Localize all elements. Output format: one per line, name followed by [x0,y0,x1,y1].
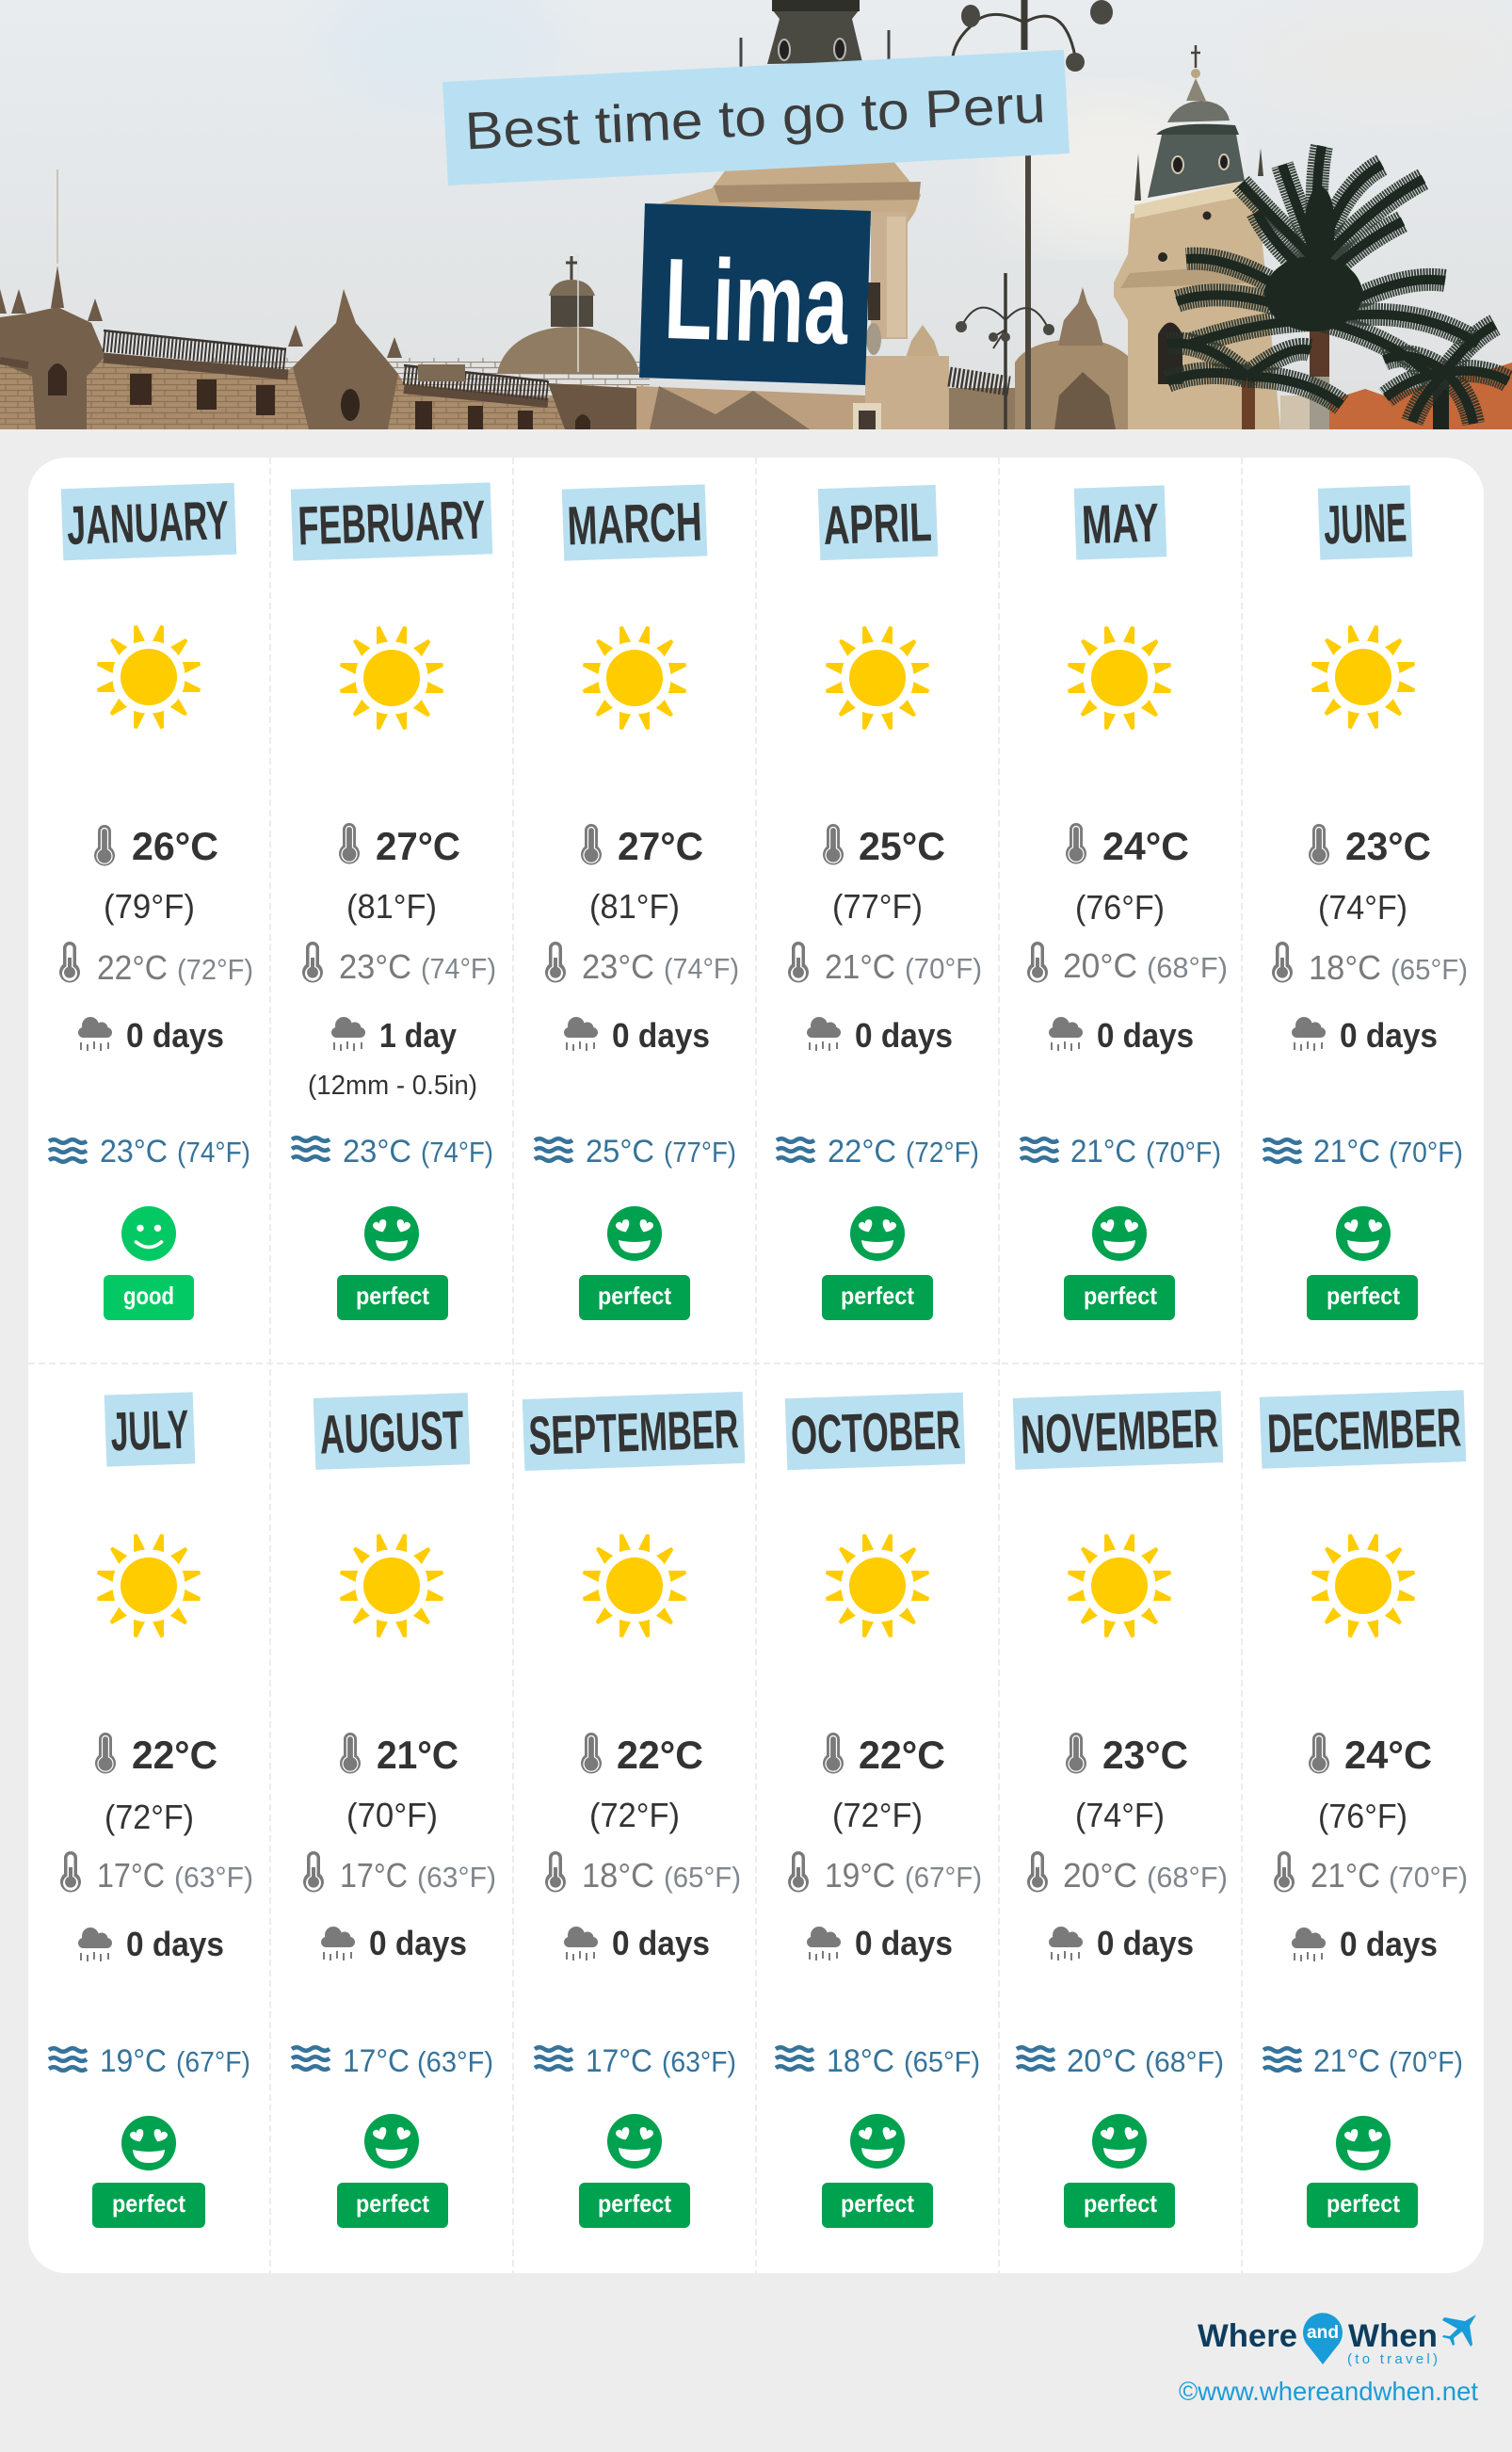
month label: NOVEMBER [1020,1397,1219,1466]
high temperature [94,824,218,868]
icon: sun [583,626,686,730]
low temperature: (74°F) [664,952,739,985]
rainy days [807,1016,953,1055]
high temperature Fahrenheit: (72°F) [589,1796,680,1834]
sea temperature: (63°F) [417,2045,493,2078]
high temperature: 24°C [1344,1733,1432,1777]
low temperature [788,1851,982,1895]
sea temperature [1263,2043,1463,2079]
month label [291,482,492,561]
sea temperature [49,1134,250,1170]
rating: perfect [579,1275,690,1320]
rating: perfect [1064,1275,1175,1320]
rainy days: 1 day [379,1016,457,1055]
month label: MAY [1081,492,1160,556]
sea temperature [49,2043,250,2079]
panel: January [49,483,253,1320]
icon: perfect smiley [1092,1206,1147,1261]
low temperature: (74°F) [421,952,496,985]
sea temperature: 23°C [343,1134,411,1170]
high temperature [581,824,703,868]
high temperature Fahrenheit: (76°F) [1318,1797,1407,1835]
panel: May [1021,485,1228,1320]
sea temperature [292,1134,493,1170]
month label [785,1393,965,1470]
high temperature [823,824,945,868]
rainy days: 0 days [855,1924,953,1962]
low temperature: 20°C [1063,1856,1137,1895]
rating: perfect [337,2183,448,2228]
rainy days [78,1016,224,1055]
city label: Lima [639,203,871,385]
low temperature: (70°F) [905,952,982,985]
high temperature: 21°C [377,1733,458,1777]
icon: perfect smiley [850,1206,905,1261]
sea temperature: 20°C [1067,2043,1136,2079]
rating: perfect: perfect [112,2189,185,2218]
rainy days [331,1016,457,1055]
month label: JUNE [1323,492,1407,557]
month label [523,1392,745,1471]
high temperature: 27°C [618,824,703,868]
sea temperature: (67°F) [176,2045,250,2078]
rainy days [321,1924,467,1962]
sea temperature: (72°F) [906,1136,979,1169]
panel: July [49,1392,253,2228]
rating: perfect [822,1275,933,1320]
high temperature: 22°C [132,1733,217,1777]
rating: perfect: perfect [1084,2189,1157,2218]
month label [818,485,938,560]
low temperature: (67°F) [905,1861,982,1894]
rating: perfect: perfect [841,2189,914,2218]
panel: August [292,1393,496,2228]
rainy days: 0 days [612,1924,710,1962]
rating: perfect: perfect [356,2189,429,2218]
icon: good smiley [121,1206,176,1261]
high temperature: 24°C [1102,824,1189,868]
month label [105,1392,195,1467]
high temperature: 22°C [617,1733,703,1777]
low temperature [545,942,739,986]
rating: perfect [1307,1275,1418,1320]
high temperature [1309,824,1431,868]
icon: sun [826,1534,929,1637]
sea temperature: (70°F) [1146,1136,1221,1169]
sea temperature [777,1134,979,1170]
high temperature [1066,823,1189,868]
month label: JULY [109,1399,190,1462]
rating: perfect [579,2183,690,2228]
panel: March [535,484,739,1320]
icon: sun [340,626,443,730]
icon: sun [1311,1534,1415,1637]
high temperature: 23°C [1345,824,1431,868]
high temperature: 22°C [859,1733,945,1777]
low temperature: 18°C [1309,948,1381,987]
rating: perfect [1064,2183,1175,2228]
rating: perfect: perfect [598,1282,671,1310]
high temperature Fahrenheit: (79°F) [104,887,195,926]
sea temperature: 19°C [100,2043,167,2079]
sea temperature: 22°C [828,1134,896,1170]
month label: JANUARY [66,490,230,557]
rainy days: 0 days [369,1924,467,1962]
icon: map pin [1303,2313,1343,2364]
sea temperature: (70°F) [1389,1136,1463,1169]
icon: perfect smiley [1092,2114,1147,2169]
month label: AUGUST [318,1399,465,1466]
icon: perfect smiley [607,1206,662,1261]
rainy days: 0 days [612,1016,710,1055]
sea temperature [776,2043,980,2079]
low temperature: 21°C [825,947,895,986]
low temperature: 21°C [1311,1856,1380,1895]
low temperature: (72°F) [177,953,253,986]
sea temperature: (63°F) [662,2045,736,2078]
white calendar panel [28,458,1484,2273]
panel: June [1263,485,1468,1320]
sea temperature: (70°F) [1389,2045,1463,2078]
sea temperature: 23°C [100,1134,168,1170]
panel: October [776,1393,982,2228]
high temperature [95,1733,217,1777]
rating: good [104,1275,194,1320]
high temperature Fahrenheit: (70°F) [346,1796,438,1834]
month label [1013,1391,1223,1470]
icon: perfect smiley [1336,1206,1391,1261]
high temperature [581,1733,703,1777]
low temperature [302,942,496,986]
low temperature: 19°C [825,1856,895,1895]
rating: perfect [1307,2183,1418,2228]
icon: sun [97,625,201,729]
panel: February [291,482,496,1320]
rainy days [78,1925,224,1963]
rating: perfect [337,1275,448,1320]
title band: Best time to go to Peru [442,50,1070,186]
sea temperature: 21°C [1313,1134,1380,1170]
sea temperature: (74°F) [177,1136,250,1169]
rainy days [807,1924,953,1962]
high temperature [340,1733,458,1777]
panel: November [1013,1391,1228,2228]
high temperature Fahrenheit: (81°F) [346,887,437,926]
low temperature: (65°F) [1391,953,1468,986]
sea temperature: (74°F) [421,1136,493,1169]
rainy days: 0 days [1097,1924,1194,1962]
rainy days: 0 days [1340,1925,1438,1963]
low temperature [545,1851,741,1895]
sea temperature [292,2043,493,2079]
title band: Best time to go to Peru: Best time to go to Peru [463,74,1047,161]
sea temperature: (77°F) [664,1136,736,1169]
rainy days [564,1016,710,1055]
low temperature: (70°F) [1389,1861,1468,1894]
low temperature [60,1851,253,1895]
icon: perfect smiley [364,1206,419,1261]
sea temperature: 18°C [827,2043,894,2079]
rating: perfect [92,2183,205,2228]
icon: plane [1442,2315,1476,2347]
rating: perfect [822,2183,933,2228]
sea temperature: 25°C [586,1134,654,1170]
logo: Where and When (to travel): (to travel) [1347,2351,1438,2367]
icon: sun [1311,625,1415,729]
icon: sun [1068,626,1171,730]
sea temperature: 17°C [586,2043,652,2079]
low temperature: (68°F) [1147,951,1228,984]
rating: good: good [123,1282,174,1310]
month label: FEBRUARY [297,490,487,557]
low temperature [59,942,253,987]
high temperature Fahrenheit: (81°F) [589,887,680,926]
rating: perfect: perfect [1327,2189,1400,2218]
high temperature [1066,1733,1188,1777]
panel: September [523,1392,745,2228]
month label: SEPTEMBER [527,1398,740,1467]
high temperature: 23°C [1102,1733,1188,1777]
rainy days [1049,1016,1194,1055]
high temperature Fahrenheit: (74°F) [1075,1796,1165,1834]
icon: sun [826,626,929,730]
month label [1318,485,1412,560]
icon: sun [97,1534,201,1637]
logo: Where and When (to travel): and [1307,2323,1339,2343]
high temperature: 25°C [859,824,945,868]
high temperature Fahrenheit: (74°F) [1318,888,1407,927]
low temperature: 20°C [1063,946,1137,985]
sea temperature [1021,1134,1221,1170]
icon: perfect smiley [1336,2116,1391,2170]
rainy days [1292,1016,1438,1055]
rainy days: 0 days [126,1925,224,1963]
rainy days: 0 days [1340,1016,1438,1055]
low temperature: (63°F) [417,1861,496,1894]
low temperature [1274,1851,1468,1895]
icon: perfect smiley [121,2116,176,2170]
rainy days [1292,1925,1438,1963]
high temperature Fahrenheit: (77°F) [832,887,923,926]
city label: Lima: Lima [663,234,851,368]
month label [1074,485,1166,560]
high temperature Fahrenheit: (72°F) [832,1796,923,1834]
rainfall amount: (12mm - 0.5in) [308,1071,477,1101]
sea temperature [535,2043,736,2079]
rainy days [1049,1924,1194,1962]
icon: sun [340,1534,443,1637]
rainy days: 0 days [1097,1016,1194,1055]
icon: sun [1068,1534,1171,1637]
low temperature [1027,1851,1228,1895]
icon: perfect smiley [607,2114,662,2169]
month label: OCTOBER [790,1399,961,1466]
logo: Where and When (to travel) [1198,2313,1476,2367]
icon: sun [583,1534,686,1637]
panel: April [777,485,982,1320]
high temperature [823,1733,945,1777]
low temperature: 17°C [340,1856,408,1895]
rating: perfect: perfect [1327,1282,1400,1310]
high temperature Fahrenheit: (76°F) [1075,888,1165,927]
month label [314,1393,470,1470]
high temperature: 27°C [376,824,460,868]
rating: perfect: perfect [356,1282,429,1310]
high temperature: 26°C [132,824,218,868]
low temperature: (68°F) [1147,1861,1228,1894]
sea temperature [1263,1134,1463,1170]
low temperature: 23°C [582,947,654,986]
low temperature [1272,942,1468,987]
sea temperature: 17°C [343,2043,410,2079]
logo: Where and When (to travel): Where [1198,2318,1297,2354]
month label: MARCH [566,492,703,557]
rainy days: 0 days [126,1016,224,1055]
icon: perfect smiley [850,2114,905,2169]
high temperature Fahrenheit: (72°F) [105,1798,194,1836]
month label [562,484,707,561]
low temperature: 23°C [339,947,411,986]
rating: perfect: perfect [1084,1282,1157,1310]
sea temperature [535,1134,736,1170]
panel: December [1260,1390,1468,2228]
low temperature [788,942,982,986]
rainy days: 0 days [855,1016,953,1055]
website credit: ©www.whereandwhen.net [1179,2377,1478,2406]
low temperature: (65°F) [664,1861,741,1894]
rating: perfect: perfect [598,2189,671,2218]
header photo: Lima plaza with cathedral and palms [0,0,1512,429]
low temperature: 22°C [97,948,168,987]
month label [61,483,236,560]
sea temperature: 21°C [1313,2043,1380,2079]
logo: Where and When (to travel): When [1348,2318,1438,2354]
icon: perfect smiley [364,2114,419,2169]
low temperature [1027,942,1228,985]
high temperature [339,823,460,868]
sea temperature [1017,2043,1224,2079]
sea temperature: (65°F) [904,2045,980,2078]
low temperature: 18°C [582,1856,654,1895]
low temperature: 17°C [97,1856,165,1895]
sea temperature: (68°F) [1145,2045,1224,2078]
rating: perfect: perfect [841,1282,914,1310]
low temperature [303,1851,496,1895]
month label: APRIL [822,492,933,557]
rainy days [564,1924,710,1962]
sea temperature: 21°C [1070,1134,1136,1170]
low temperature: (63°F) [174,1861,253,1894]
